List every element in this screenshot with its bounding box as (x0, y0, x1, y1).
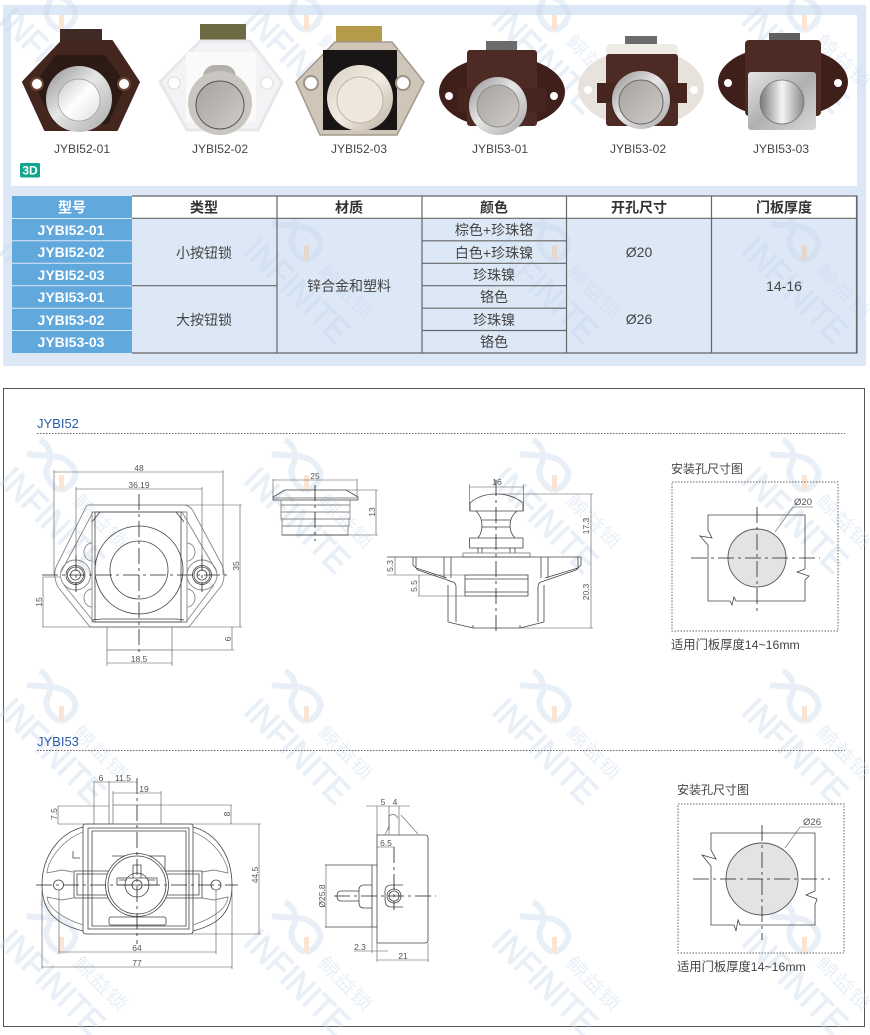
watermark tile: 鲸益锁 (562, 953, 624, 1015)
drawing: JYBI53 front view: 77 (132, 958, 142, 968)
spec table: Ø26 (626, 311, 652, 327)
3D badge: 3D (22, 164, 38, 178)
watermark tile: 鲸益锁 (812, 261, 870, 323)
spec table: 型号 (58, 200, 86, 216)
watermark tile: 鲸益锁 (562, 722, 624, 784)
spec table: 铬色 (480, 289, 508, 305)
spec table: JYBI52-02 (38, 244, 105, 260)
drawing: JYBI52 cap view: 13 (367, 507, 377, 517)
installation hole diagram: JYBI52: 安装孔尺寸图 (671, 461, 743, 476)
spec table (12, 196, 857, 353)
spec table: 白色+珍珠镍 (455, 245, 533, 261)
watermark tile: 鲸益锁 (562, 261, 624, 323)
drawing: JYBI52 side view (385, 477, 593, 634)
watermark tile: 鲸益锁 (69, 31, 131, 93)
drawing: JYBI53 side view (317, 797, 436, 962)
spec table: JYBI53-03 (38, 334, 105, 350)
spec table: 珍珠镍 (473, 267, 515, 283)
drawing: JYBI53 front view: 19 (139, 784, 149, 794)
spec table: 棕色+珍珠铬 (455, 222, 533, 238)
drawing: JYBI53 side view: 4 (393, 797, 398, 807)
drawing: JYBI52 cap view (273, 471, 378, 541)
spec table: 珍珠镍 (473, 312, 515, 328)
drawing: JYBI52 front view: 15 (34, 597, 44, 607)
drawing: JYBI53 front view: 44.5 (250, 866, 260, 883)
watermark tile: INFINITE (484, 230, 605, 351)
spec table: 14-16 (766, 278, 802, 294)
drawing: JYBI53 front view: 7.5 (49, 808, 59, 820)
watermark tile: INFINITE (236, 460, 357, 581)
drawing: JYBI52 side view: 16 (492, 477, 502, 487)
spec table: 材质 (335, 200, 363, 216)
drawing: JYBI53 front view: 11.5 (115, 773, 131, 783)
product: JYBI53-02: JYBI53-02 (610, 142, 666, 156)
watermark tile: 鲸益锁 (314, 953, 376, 1015)
drawing: JYBI52 front view: 18.5 (131, 654, 148, 664)
spec table: 开孔尺寸 (611, 200, 667, 216)
watermark tile: INFINITE (484, 691, 605, 812)
drawing: JYBI53 side view: 6.5 (380, 838, 392, 848)
watermark tile: INFINITE (484, 0, 605, 121)
watermark tile: 鲸益锁 (69, 491, 131, 553)
heading: JYBI53: JYBI53 (37, 734, 79, 749)
drawing: JYBI52 side view: 5.5 (409, 580, 419, 592)
top panel background (3, 5, 866, 366)
watermark tile: 鲸益锁 (562, 31, 624, 93)
watermark tile: 鲸益锁 (69, 953, 131, 1015)
heading: JYBI52: JYBI52 (37, 416, 79, 431)
spec table: JYBI52-01 (38, 222, 105, 238)
installation hole diagram: JYBI53: Ø26 (803, 817, 821, 828)
drawing: JYBI52 front view: 36.19 (128, 480, 150, 490)
spec table: JYBI52-03 (38, 267, 105, 283)
product: JYBI52-02: JYBI52-02 (192, 142, 248, 156)
watermark tile: INFINITE (734, 230, 855, 351)
watermark tile: 鲸益锁 (314, 31, 376, 93)
drawing: JYBI53 front view: 8 (222, 811, 232, 816)
drawing: JYBI52 front view: 6 (223, 636, 233, 641)
product: JYBI52-03: JYBI52-03 (331, 142, 387, 156)
spec table: 铬色 (480, 334, 508, 350)
product: JYBI53-02 (578, 36, 704, 156)
product: JYBI52-02 (160, 24, 282, 156)
watermark tile: 鲸益锁 (69, 722, 131, 784)
watermark tile: 鲸益锁 (314, 491, 376, 553)
product: JYBI53-01 (439, 41, 565, 156)
watermark tile: INFINITE (734, 0, 855, 121)
drawing: JYBI52 side view: 20.3 (581, 583, 591, 600)
drawing: JYBI53 front view: 6 (99, 773, 104, 783)
drawing: JYBI53 side view: 2.3 (354, 942, 366, 952)
watermark tile: INFINITE (484, 460, 605, 581)
drawing: JYBI52 side view: 17.3 (581, 517, 591, 534)
spec table: 锌合金和塑料 (307, 278, 391, 294)
watermark tile: 鲸益锁 (69, 261, 131, 323)
drawing: JYBI53 side view: Ø25.8 (317, 884, 327, 908)
installation hole diagram: JYBI53: 适用门板厚度14~16mm (677, 959, 806, 974)
spec table: 大按钮锁 (176, 312, 232, 328)
product: JYBI53-03: JYBI53-03 (753, 142, 809, 156)
spec table: JYBI53-02 (38, 312, 105, 328)
spec table: 门板厚度 (756, 200, 812, 216)
watermark tile: 鲸益锁 (812, 722, 870, 784)
product: JYBI52-01: JYBI52-01 (54, 142, 110, 156)
installation hole diagram: JYBI52 (671, 461, 838, 652)
watermark tile: INFINITE (236, 691, 357, 812)
drawing: JYBI52 cap view: 25 (310, 471, 320, 481)
watermark tile: INFINITE (236, 0, 357, 121)
watermark tile: 鲸益锁 (314, 722, 376, 784)
installation hole diagram: JYBI53: 安装孔尺寸图 (677, 782, 749, 797)
technical drawing panel (4, 388, 864, 1026)
product: JYBI52-03 (296, 26, 424, 156)
watermark tile: INFINITE (734, 460, 855, 581)
spec table: Ø20 (626, 244, 652, 260)
spec table: 颜色 (480, 200, 508, 216)
product: JYBI53-03 (718, 33, 848, 156)
drawing: JYBI53 side view: 5 (381, 797, 386, 807)
watermark tile: 鲸益锁 (812, 491, 870, 553)
drawing: JYBI53 front view: 64 (132, 943, 142, 953)
watermark tile: 鲸益锁 (562, 491, 624, 553)
drawing: JYBI53 side view: 21 (398, 951, 408, 961)
spec table: JYBI53-01 (38, 289, 105, 305)
spec table: 类型 (190, 200, 218, 216)
drawing: JYBI52 front view: 35 (231, 561, 241, 571)
installation hole diagram: JYBI52: Ø20 (794, 497, 812, 508)
spec table: 小按钮锁 (176, 245, 232, 261)
product: JYBI52-01 (23, 29, 139, 156)
watermark tile: 鲸益锁 (812, 953, 870, 1015)
drawing: JYBI52 front view: 48 (134, 463, 144, 473)
product: JYBI53-01: JYBI53-01 (472, 142, 528, 156)
drawing: JYBI53 front view (36, 773, 261, 969)
installation hole diagram: JYBI52: 适用门板厚度14~16mm (671, 637, 800, 652)
watermark tile: INFINITE (734, 691, 855, 812)
watermark tile: INFINITE (236, 230, 357, 351)
product photo panel (11, 15, 857, 186)
drawing: JYBI52 front view (34, 463, 242, 666)
watermark tile: 鲸益锁 (812, 31, 870, 93)
watermark tile: 鲸益锁 (314, 261, 376, 323)
drawing: JYBI52 side view: 5.3 (385, 560, 395, 572)
installation hole diagram: JYBI53 (677, 782, 844, 974)
